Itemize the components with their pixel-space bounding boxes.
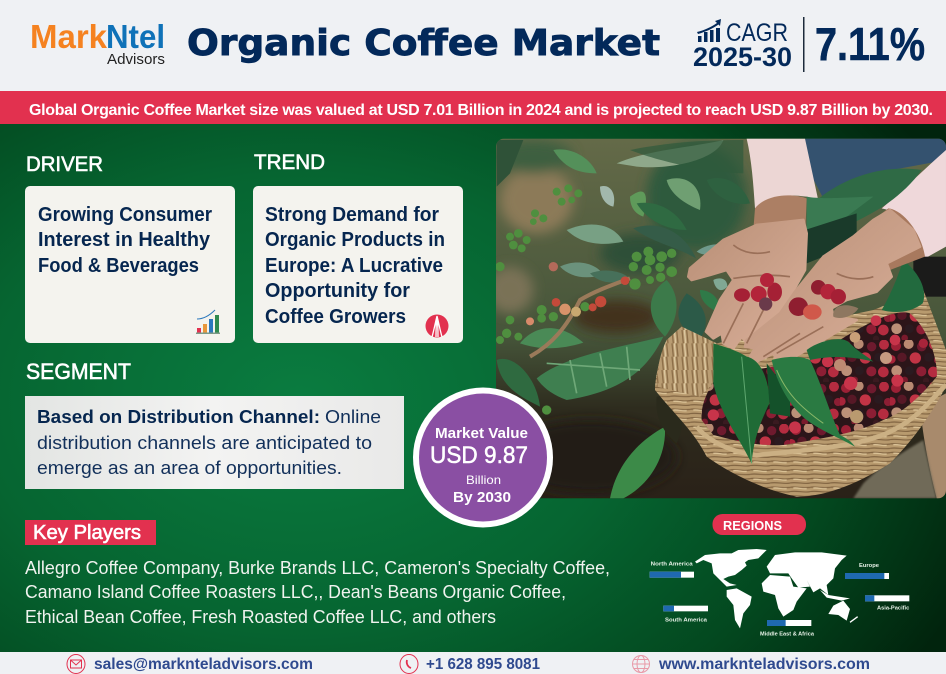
dark leaves behind hands (806, 168, 922, 221)
large leaves over basket (713, 343, 769, 463)
panel: trend card: Strong Demand for (265, 204, 439, 226)
logo: MarkNtel Advisors (30, 18, 165, 68)
logo: MarkNtel Advisors: Ntel (106, 18, 165, 55)
panel: segment description: Online (325, 406, 381, 427)
website: www.marknteladvisors.com (658, 656, 870, 673)
panel: trend card (253, 186, 463, 343)
forecast period: 2025-30 (693, 42, 792, 72)
green main background (0, 124, 946, 652)
panel: driver card (25, 186, 235, 343)
panel: driver card: Interest in Healthy (38, 229, 211, 251)
market value circle: Billion (466, 473, 501, 487)
icon: email (67, 654, 85, 674)
market value circle: USD 9.87 (430, 442, 528, 469)
icon: phone (400, 654, 418, 674)
CAGR value: 7.11% (815, 18, 925, 70)
red summary banner: Global Organic Coffee Market size was valued at USD 7.01 Billion in 2024 and is projected to reach USD 9.87 Billion by 2030. (29, 102, 933, 119)
footer bar (0, 652, 946, 674)
heading: trend: TREND (254, 151, 325, 174)
CAGR block (693, 17, 925, 72)
photo: hands holding coffee cherries over basket (487, 139, 946, 498)
red summary banner (0, 91, 946, 124)
icon: growth bars (697, 19, 721, 42)
market value circle: Market Value (435, 425, 528, 442)
panel: trend card: Coffee Growers (265, 306, 406, 328)
email address: sales@marknteladvisors.com (94, 656, 313, 673)
world map (695, 549, 858, 628)
key players list: Camano Island Coffee Roasters LLC,, Dean's Beans Organic Coffee, (25, 582, 566, 602)
ripening cherries on branch (526, 262, 629, 325)
key players list (25, 558, 610, 627)
logo: MarkNtel Advisors: Advisors (107, 51, 165, 68)
market value circle (413, 388, 553, 528)
icon: globe (632, 656, 650, 672)
rim highlight (697, 385, 946, 455)
shirt and sleeves (805, 139, 946, 198)
region labels: Middle East & Africa (760, 632, 814, 638)
region labels (651, 562, 909, 638)
panel: trend card: Opportunity for (265, 280, 410, 302)
region labels: North America (651, 562, 693, 568)
forearms and wrists (754, 195, 807, 225)
icon: red trend emblem (426, 314, 448, 338)
panel: driver card: Growing Consumer (38, 204, 212, 226)
regions pill: REGIONS (723, 519, 782, 533)
logo: MarkNtel Advisors: Mark (30, 18, 108, 55)
red cherries in hands (734, 273, 846, 320)
icon: bar chart growth (196, 310, 220, 334)
heading: segment: SEGMENT (26, 359, 131, 384)
panel: driver card: Food & Beverages (38, 255, 199, 277)
heading: driver: DRIVER (26, 153, 103, 176)
region labels: Europe (859, 563, 879, 569)
right hand (745, 210, 920, 362)
title: Organic Coffee Market (187, 23, 660, 64)
market value circle: By 2030 (453, 489, 511, 506)
key players list: Allegro Coffee Company, Burke Brands LLC, Cameron's Specialty Coffee, (25, 558, 610, 578)
basket (655, 290, 946, 497)
soft background tones (487, 140, 747, 493)
panel: trend card: Organic Products in (265, 229, 445, 251)
region labels: Asia-Pacific (877, 606, 909, 612)
leaf beside right hand (882, 260, 924, 312)
regions pill (712, 514, 806, 535)
panel: segment description: emerge as an area of opportunities. (37, 457, 342, 478)
panel: segment description (25, 396, 404, 489)
key players heading: Key Players (33, 522, 141, 544)
panel: segment description: Based on Distribution Channel: (37, 406, 320, 427)
region bars (650, 572, 909, 626)
branch (530, 278, 630, 357)
panel: segment description: distribution channels are anticipated to (37, 432, 372, 453)
left hand (688, 220, 807, 348)
ground and leg at lower right (920, 393, 946, 498)
palm creases and soil (723, 245, 873, 357)
green coffee cherry clusters (495, 184, 677, 415)
phone number: +1 628 895 8081 (426, 656, 540, 673)
basket inner wall (657, 327, 717, 397)
accent cherries (708, 315, 928, 433)
foliage leaves (497, 140, 750, 498)
key players list: Ethical Bean Coffee, Fresh Roasted Coffee LLC, and others (25, 607, 496, 627)
coffee cherries in basket (702, 312, 937, 445)
region bars and labels (650, 562, 909, 638)
region labels: South America (665, 618, 707, 624)
CAGR label: CAGR (726, 19, 788, 47)
panel: trend card: Europe: A Lucrative (265, 255, 443, 277)
